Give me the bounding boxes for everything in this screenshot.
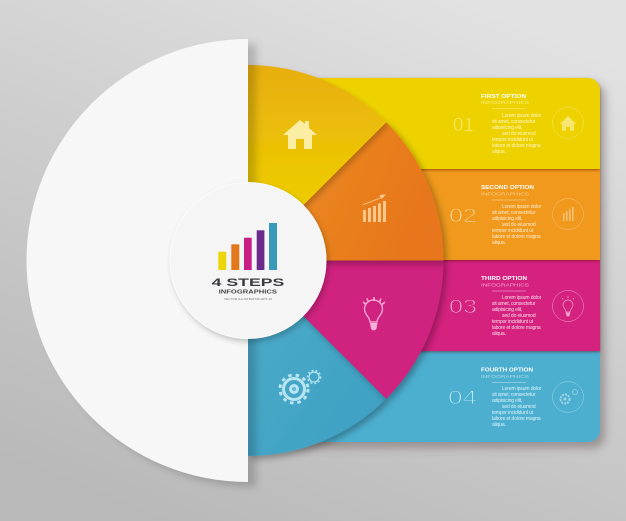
- heading: first option: FIRST OPTION: [481, 94, 527, 100]
- text block: fourth option: tempor incididunt ut: [492, 410, 534, 416]
- icon: small bulb in ring: [552, 290, 584, 322]
- bar chart: logo bars: [218, 223, 277, 270]
- heading: third option: THIRD OPTION: [481, 276, 527, 282]
- card stack shadow: [252, 84, 605, 448]
- icon: small chart in ring: [552, 198, 584, 230]
- text block: third option: Lorem ipsum dolor: [502, 295, 542, 301]
- text block: second option: adipisicing elit,: [492, 216, 522, 222]
- text block: third option: labore et dolore magna: [492, 325, 541, 331]
- number 02: 02: [449, 205, 477, 227]
- heading: fourth option: FOURTH OPTION: [481, 368, 533, 374]
- text block: fourth option: Lorem ipsum dolor: [502, 386, 542, 392]
- heading: third option: [481, 276, 529, 291]
- chart: circular segments: [248, 65, 444, 456]
- text block: second option: aliqua.: [492, 240, 506, 246]
- heading: fourth option: [481, 368, 533, 382]
- panel: fourth option card: [248, 346, 600, 442]
- subtitle: infographics: INFOGRAPHICS: [219, 290, 278, 296]
- text block: first option: adipisicing elit,: [492, 125, 522, 131]
- heading: first option: [481, 94, 529, 108]
- segment: yellow: [248, 65, 386, 260]
- icon: small house in ring: [552, 108, 584, 138]
- text block: first option: sit amet, consectetur: [492, 119, 536, 125]
- text block: fourth option: sit amet, consectetur: [492, 392, 536, 398]
- text block: second option: Lorem ipsum dolor: [502, 204, 542, 210]
- number 03: 03: [449, 296, 477, 318]
- text block: third option: adipisicing elit,: [492, 307, 522, 313]
- panel: centre circle: [170, 182, 326, 338]
- panel: second option card: [248, 169, 600, 260]
- text block: second option: sed do eiusmod: [502, 222, 536, 228]
- text block: fourth option: aliqua.: [492, 422, 506, 428]
- heading: first option: INFOGRAPHICS: [481, 100, 529, 106]
- icon: house: [283, 120, 317, 149]
- heading: second option: INFOGRAPHICS: [481, 192, 529, 198]
- segment: orange: [248, 122, 444, 260]
- text block: third option: tempor incididunt ut: [492, 319, 534, 325]
- segment: blue: [248, 260, 386, 456]
- icon: small gears in ring: [552, 382, 584, 412]
- segment: pink: [248, 260, 444, 399]
- icon: light bulb: [363, 297, 385, 330]
- text block: second option: tempor incididunt ut: [492, 228, 534, 234]
- text block: third option: sit amet, consectetur: [492, 301, 536, 307]
- text block: fourth option: sed do eiusmod: [502, 404, 536, 410]
- text block: first option: aliqua.: [492, 149, 506, 155]
- title: 4 steps: 4 STEPS: [212, 277, 284, 289]
- number 04: 04: [448, 387, 477, 409]
- text block: first option: labore et dolore magna: [492, 143, 541, 149]
- text block: fourth option: adipisicing elit,: [492, 398, 522, 404]
- text block: first option: tempor incididunt ut: [492, 137, 534, 143]
- icon: gears: [280, 370, 320, 403]
- panel: third option card: [248, 260, 600, 351]
- heading: fourth option: INFOGRAPHICS: [481, 374, 529, 380]
- text block: second option: labore et dolore magna: [492, 234, 541, 240]
- text block: fourth option: labore et dolore magna: [492, 416, 541, 422]
- heading: second option: SECOND OPTION: [481, 185, 534, 191]
- text block: third option: sed do eiusmod: [502, 313, 536, 319]
- number 01: 01: [453, 114, 474, 136]
- panel: white half circle: [26, 39, 248, 482]
- heading: third option: INFOGRAPHICS: [481, 282, 529, 288]
- panel: first option card: [248, 78, 600, 169]
- text block: first option: sed do eiusmod: [502, 131, 536, 137]
- text block: second option: sit amet, consectetur: [492, 210, 536, 216]
- text block: third option: aliqua.: [492, 331, 506, 337]
- caption: vector illustration: VECTOR ILLUSTRATION EPS 10: [224, 297, 273, 301]
- text block: first option: Lorem ipsum dolor: [502, 113, 542, 119]
- icon: rising chart: [362, 194, 386, 222]
- heading: second option: [481, 185, 534, 200]
